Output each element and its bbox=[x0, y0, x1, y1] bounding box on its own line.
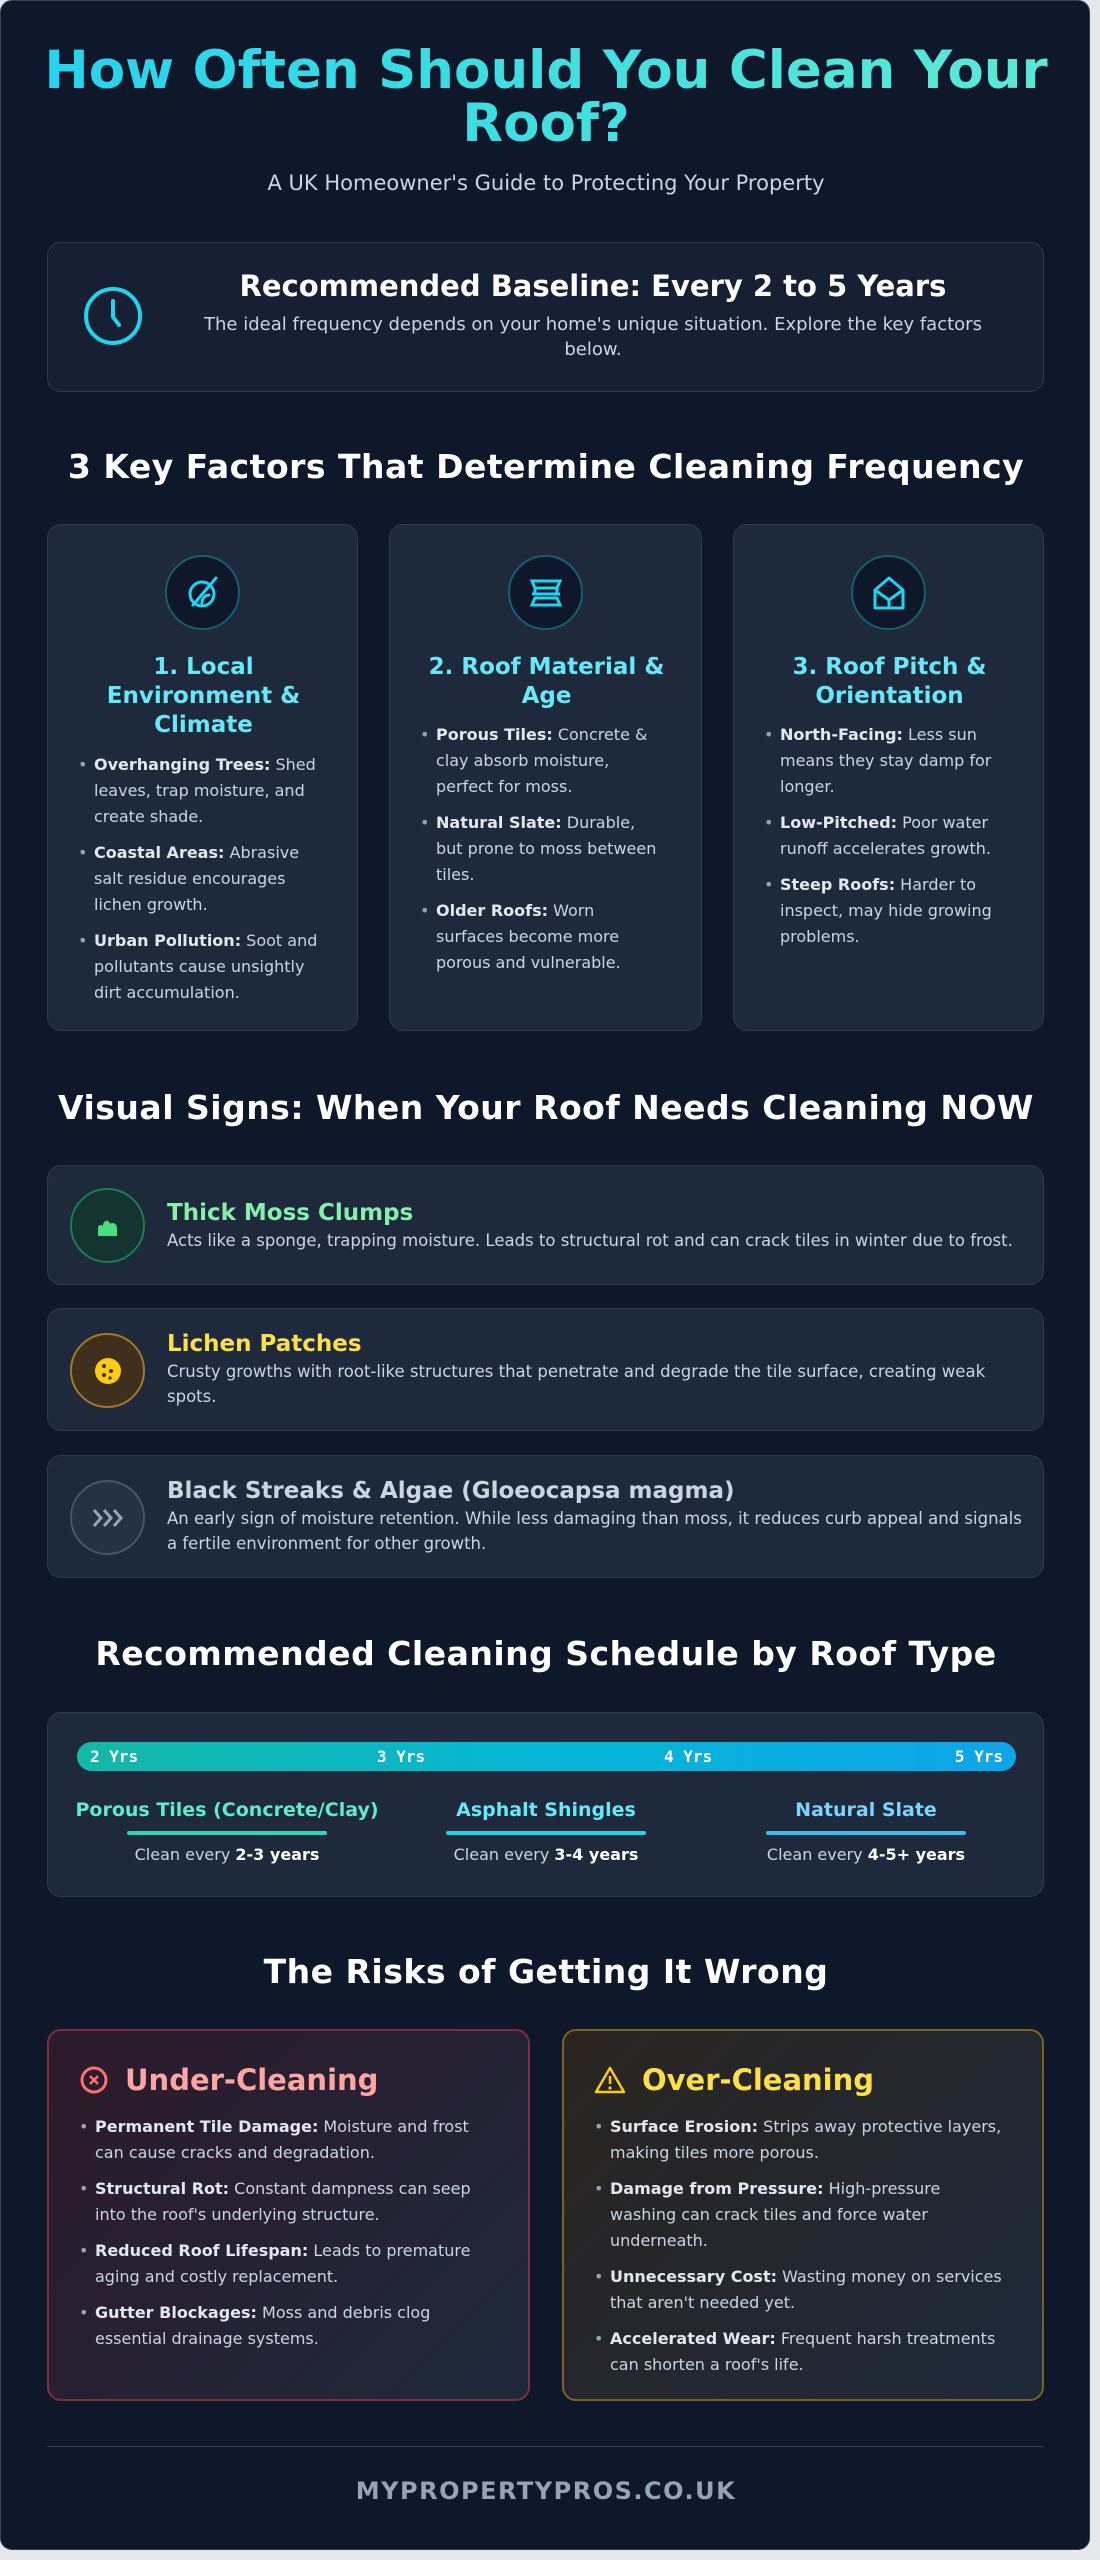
column: asphalt bbox=[446, 1799, 646, 1864]
over bullets: Unnecessary Cost: Wasting money on services that aren't needed yet. bbox=[610, 2267, 1002, 2312]
timeline bar: 4 Yrs bbox=[664, 1747, 712, 1766]
over bullets: Surface Erosion: Strips away protective layers, making tiles more porous. bbox=[610, 2117, 1001, 2162]
under bullets bbox=[81, 2117, 471, 2348]
timeline bar bbox=[77, 1742, 1016, 1771]
factor bullets: Older Roofs: Worn surfaces become more porous and vulnerable. bbox=[436, 901, 621, 972]
column: slate bbox=[766, 1799, 966, 1864]
factor title bbox=[429, 654, 664, 709]
subtitle: A UK Homeowner's Guide to Protecting Your Property bbox=[267, 171, 824, 195]
sign text: Lichen Patches bbox=[167, 1331, 362, 1357]
factor bullets: Steep Roofs: Harder to inspect, may hide growing problems. bbox=[780, 875, 992, 946]
factor title: Orientation bbox=[815, 683, 964, 709]
sign text: Black Streaks & Algae (Gloeocapsa magma) bbox=[167, 1478, 734, 1504]
factor bullets: North-Facing: Less sun means they stay damp for longer. bbox=[780, 725, 991, 796]
factor title: 2. Roof Material & bbox=[429, 654, 664, 680]
column: porous tiles: Porous Tiles (Concrete/Clay) bbox=[75, 1799, 379, 1821]
icon: streaks bbox=[70, 1480, 145, 1555]
factor title: 3. Roof Pitch & bbox=[793, 654, 986, 680]
under bullets: Permanent Tile Damage: Moisture and frost can cause cracks and degradation. bbox=[95, 2117, 469, 2162]
timeline bar: 2 Yrs bbox=[90, 1747, 138, 1766]
timeline bar: 5 Yrs bbox=[955, 1747, 1003, 1766]
heading: visual signs: Visual Signs: When Your Roof Needs Cleaning NOW bbox=[58, 1088, 1034, 1127]
panel: moss bbox=[47, 1165, 1044, 1285]
factor title: Environment & bbox=[107, 683, 300, 709]
factor bullets: Natural Slate: Durable, but prone to moss between tiles. bbox=[436, 813, 656, 884]
over heading: Over-Cleaning bbox=[642, 2063, 874, 2097]
panel: factor 2 bbox=[389, 524, 702, 1031]
over bullets: Accelerated Wear: Frequent harsh treatments can shorten a roof's life. bbox=[610, 2329, 995, 2374]
column: porous tiles bbox=[75, 1799, 379, 1864]
heading: schedule: Recommended Cleaning Schedule by Roof Type bbox=[95, 1634, 997, 1673]
footer: MYPROPERTYPROS.CO.UK bbox=[356, 2477, 736, 2505]
factor title bbox=[793, 654, 986, 709]
column: asphalt: Asphalt Shingles bbox=[456, 1799, 636, 1821]
factor title: Climate bbox=[154, 712, 253, 738]
panel: schedule bbox=[47, 1712, 1044, 1897]
under heading: Under-Cleaning bbox=[125, 2063, 378, 2097]
sign text: Acts like a sponge, trapping moisture. Leads to structural rot and can crack tiles in winter due to frost. bbox=[167, 1231, 1013, 1250]
under bullets: Gutter Blockages: Moss and debris clog essential drainage systems. bbox=[95, 2303, 430, 2348]
factor title bbox=[107, 654, 300, 738]
baseline text: The ideal frequency depends on your home's unique situation. Explore the key factors below. bbox=[204, 314, 982, 360]
sign text: Thick Moss Clumps bbox=[167, 1200, 413, 1226]
icon: house bbox=[851, 555, 926, 630]
timeline bar: 3 Yrs bbox=[377, 1747, 425, 1766]
panel: lichen bbox=[47, 1308, 1044, 1431]
column: asphalt: Clean every 3-4 years bbox=[454, 1845, 638, 1864]
panel: factor 1 bbox=[47, 524, 358, 1031]
icon: lichen bbox=[70, 1333, 145, 1408]
panel: under-cleaning bbox=[47, 2029, 530, 2401]
factor bullets bbox=[80, 755, 317, 1002]
factor bullets bbox=[422, 725, 656, 972]
factor bullets bbox=[766, 725, 992, 946]
panel: factor 3 bbox=[733, 524, 1044, 1031]
factor bullets: Urban Pollution: Soot and pollutants cause unsightly dirt accumulation. bbox=[94, 931, 317, 1002]
icon: leaf bbox=[165, 555, 240, 630]
factor bullets: Porous Tiles: Concrete & clay absorb moisture, perfect for moss. bbox=[436, 725, 647, 796]
over bullets bbox=[596, 2117, 1002, 2374]
column: slate: Natural Slate bbox=[795, 1799, 937, 1821]
factor title: 1. Local bbox=[153, 654, 254, 680]
heading: key factors: 3 Key Factors That Determine Cleaning Frequency bbox=[68, 447, 1024, 486]
icon: clock bbox=[84, 287, 142, 345]
factor bullets: Overhanging Trees: Shed leaves, trap moisture, and create shade. bbox=[94, 755, 316, 826]
factor bullets: Low-Pitched: Poor water runoff accelerates growth. bbox=[780, 813, 991, 858]
sign text bbox=[167, 1200, 1013, 1250]
panel: baseline bbox=[47, 242, 1044, 392]
over bullets: Damage from Pressure: High-pressure washing can crack tiles and force water underneath. bbox=[610, 2179, 940, 2250]
column: slate: Clean every 4-5+ years bbox=[767, 1845, 965, 1864]
under bullets: Structural Rot: Constant dampness can seep into the roof's underlying structure. bbox=[95, 2179, 471, 2224]
sign text: Crusty growths with root-like structures that penetrate and degrade the tile surface, creating weak spots. bbox=[167, 1362, 985, 1406]
factor bullets: Coastal Areas: Abrasive salt residue encourages lichen growth. bbox=[94, 843, 299, 914]
sign text bbox=[167, 1331, 985, 1406]
title: Roof? bbox=[462, 93, 630, 154]
heading: risks: The Risks of Getting It Wrong bbox=[264, 1952, 828, 1991]
title bbox=[1, 44, 1091, 150]
title: How Often Should You Clean Your bbox=[44, 40, 1048, 101]
column: porous tiles: Clean every 2-3 years bbox=[135, 1845, 319, 1864]
baseline heading: Recommended Baseline: Every 2 to 5 Years bbox=[240, 269, 946, 303]
panel: over-cleaning bbox=[562, 2029, 1044, 2401]
sign text: An early sign of moisture retention. While less damaging than moss, it reduces curb appeal and signals a fertile environment for other growth. bbox=[167, 1509, 1022, 1553]
sign text bbox=[167, 1478, 1022, 1553]
icon: moss bbox=[70, 1188, 145, 1263]
under bullets: Reduced Roof Lifespan: Leads to premature aging and costly replacement. bbox=[95, 2241, 470, 2286]
panel: algae bbox=[47, 1455, 1044, 1578]
factor title: Age bbox=[522, 683, 571, 709]
icon: tiles bbox=[508, 555, 583, 630]
